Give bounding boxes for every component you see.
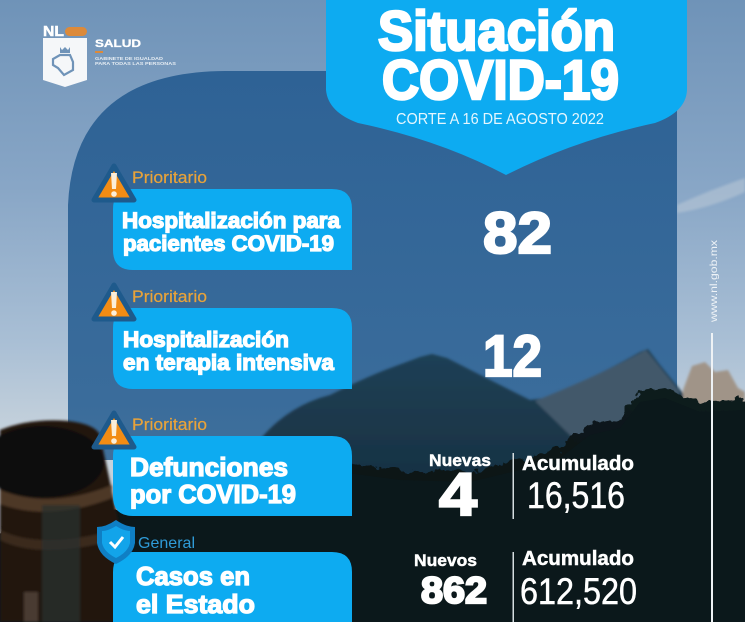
card: pacientes COVID-19	[123, 231, 334, 256]
logo orange mark	[65, 27, 87, 36]
title	[378, 0, 619, 111]
new deaths: 4	[439, 461, 478, 528]
card	[113, 189, 352, 270]
cumulative cases	[520, 548, 637, 612]
mountain silhouette	[262, 349, 745, 622]
date: CORTE A 16 DE AGOSTO 2022	[396, 111, 604, 128]
logo	[43, 23, 176, 87]
card: en terapia intensiva	[123, 350, 334, 375]
row: cases	[97, 520, 637, 622]
icon: warning	[94, 413, 134, 447]
card: por COVID-19	[130, 479, 296, 509]
tag: General	[138, 535, 195, 552]
row: deaths	[94, 413, 634, 528]
card	[113, 436, 352, 516]
card: Hospitalización para	[122, 208, 340, 233]
left structure photo	[0, 420, 122, 622]
icon: warning	[94, 285, 134, 319]
logo tagline: PARA TODAS LAS PERSONAS	[95, 61, 176, 66]
blue translucent panel	[68, 71, 677, 622]
icon: warning	[94, 166, 134, 200]
tag: Prioritario	[132, 169, 207, 187]
card: Casos en	[136, 561, 250, 591]
tree line and dark foreground	[0, 388, 745, 622]
row: hospitalization	[94, 166, 552, 270]
cumulative deaths: 16,516	[527, 475, 625, 516]
header banner	[326, 0, 687, 175]
icon: shield	[97, 520, 135, 564]
new deaths	[429, 451, 491, 528]
new deaths: Nuevas	[429, 451, 491, 470]
cumulative cases: 612,520	[520, 571, 637, 612]
new cases	[414, 551, 487, 611]
value: 82	[483, 201, 552, 266]
title: COVID-19	[382, 48, 619, 111]
new cases: Nuevos	[414, 551, 477, 570]
logo wordmark NL: NL	[43, 23, 64, 40]
title: Situación	[378, 0, 615, 62]
website url: www.nl.gob.mx	[708, 239, 720, 323]
card	[113, 552, 352, 622]
row: intensive care	[94, 285, 542, 389]
divider	[512, 453, 514, 519]
value: 12	[483, 324, 542, 389]
cumulative cases: Acumulado	[522, 548, 634, 570]
cumulative deaths	[522, 453, 634, 516]
logo shield	[43, 38, 87, 87]
logo tagline	[95, 56, 176, 66]
cumulative deaths: Acumulado	[522, 453, 634, 475]
logo tagline: GABINETE DE IGUALDAD	[95, 56, 163, 61]
vertical rule	[711, 333, 713, 622]
divider	[512, 552, 514, 622]
logo SALUD: SALUD	[95, 38, 141, 50]
logo accent	[95, 51, 103, 53]
tag: Prioritario	[132, 416, 207, 434]
card: Defunciones	[130, 452, 288, 482]
card: el Estado	[136, 589, 255, 619]
tag: Prioritario	[132, 288, 207, 306]
card: Hospitalización	[123, 327, 289, 352]
new cases: 862	[421, 570, 487, 611]
card	[113, 308, 352, 389]
